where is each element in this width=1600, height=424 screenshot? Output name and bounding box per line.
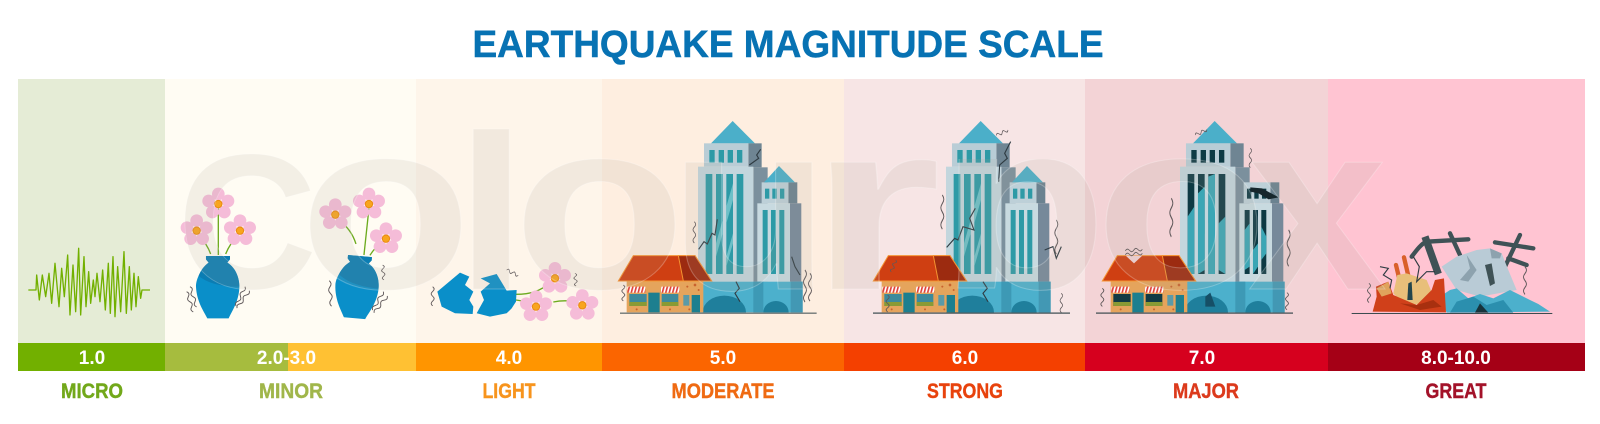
panel: great xyxy=(1328,79,1585,403)
watermark xyxy=(184,129,1386,292)
watermark: b xyxy=(940,71,1107,339)
magnitude bar: 1.0 xyxy=(18,343,165,371)
icon: seismic wave xyxy=(28,248,150,317)
watermark: u xyxy=(669,73,830,340)
watermark: r xyxy=(808,72,942,340)
magnitude bar: 2.0-3.0 xyxy=(165,343,416,371)
magnitude bar: 4.0 xyxy=(416,343,602,371)
title: EARTHQUAKE MAGNITUDE SCALE xyxy=(472,24,1104,66)
upright vase xyxy=(181,188,256,318)
panel: moderate xyxy=(602,79,844,403)
illustration: collapsed rubble xyxy=(1352,233,1552,314)
icon: vases with flowers xyxy=(181,188,402,320)
label: minor: MINOR xyxy=(259,380,323,403)
panel: major xyxy=(1085,79,1328,403)
magnitude value: 5.0: 5.0 xyxy=(710,348,736,369)
magnitude value: 7.0: 7.0 xyxy=(1189,348,1215,369)
magnitude value: 8.0-10.0: 8.0-10.0 xyxy=(1421,348,1491,369)
watermark: o xyxy=(513,70,686,339)
icon: broken vase and flowers xyxy=(431,262,598,321)
panel: minor xyxy=(165,79,416,403)
magnitude bar: 5.0 xyxy=(602,343,844,371)
illustration: cracked tower and shop xyxy=(618,121,817,314)
label: great: GREAT xyxy=(1426,380,1487,403)
magnitude bar: 6.0 xyxy=(844,343,1085,371)
watermark: o xyxy=(299,70,472,339)
label: light: LIGHT xyxy=(482,380,536,403)
magnitude value: 2.0-3.0: 2.0-3.0 xyxy=(257,348,316,369)
label: major: MAJOR xyxy=(1173,380,1239,403)
magnitude bar: 8.0-10.0 xyxy=(1328,343,1585,371)
label: micro: MICRO xyxy=(61,380,123,403)
watermark: C xyxy=(177,114,317,329)
magnitude value: 1.0: 1.0 xyxy=(79,348,105,369)
panel: strong xyxy=(844,79,1085,403)
panel: micro xyxy=(18,79,165,403)
illustration: damaged tower and shop xyxy=(873,121,1070,314)
magnitude value: 6.0: 6.0 xyxy=(952,348,978,369)
watermark: o xyxy=(1095,70,1268,339)
panel: light xyxy=(416,79,602,403)
watermark: l xyxy=(455,90,528,336)
label: strong: STRONG xyxy=(927,380,1003,403)
watermark: x xyxy=(1248,71,1387,340)
illustration: heavily damaged tower and shop xyxy=(1096,121,1293,314)
tilted vase xyxy=(319,188,402,320)
magnitude value: 4.0: 4.0 xyxy=(496,348,522,369)
magnitude bar: 7.0 xyxy=(1085,343,1328,371)
label: moderate: MODERATE xyxy=(672,380,774,403)
